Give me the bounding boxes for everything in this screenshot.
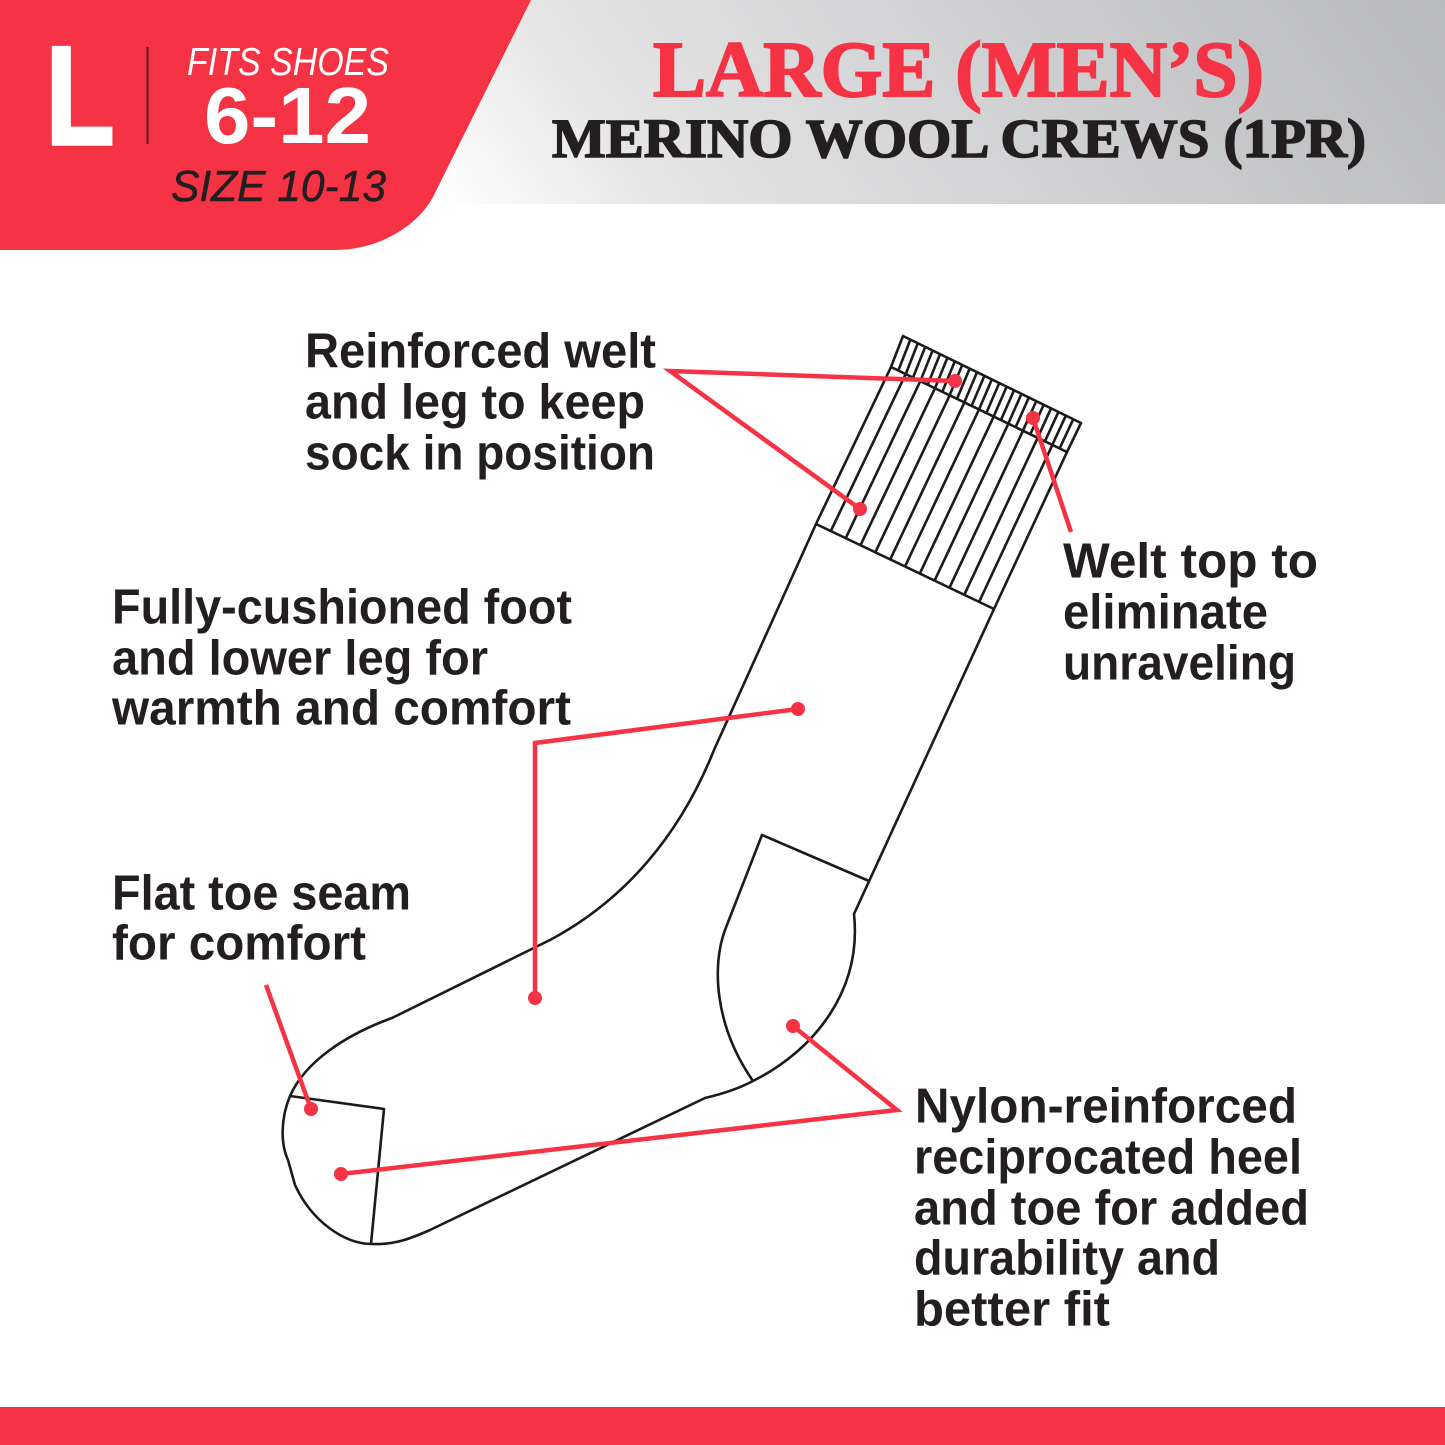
callout: welt and leg (670, 371, 962, 516)
callout text: welt top (1063, 534, 1318, 690)
callout text: heel and toe (914, 1080, 1309, 1336)
footer bar (0, 1407, 1445, 1445)
subtitle: MERINO WOOL CREWS (1PR) (552, 108, 1366, 169)
callout text: heel and toe: durability and (914, 1232, 1220, 1286)
shoe size range: 6-12 (204, 71, 371, 160)
size letter: L (46, 17, 115, 174)
title: LARGE (MEN’S) (653, 27, 1264, 114)
callout text: heel and toe: reciprocated heel (914, 1130, 1302, 1184)
callout text: toe seam: Flat toe seam (112, 866, 411, 920)
sock diagram (283, 336, 1081, 1244)
toe patch (290, 1096, 384, 1244)
callout text: reinforced welt (305, 324, 656, 480)
callout text: reinforced welt: Reinforced welt (305, 324, 656, 378)
red size badge (0, 0, 531, 250)
callout text: cushioned foot: warmth and comfort (111, 682, 571, 736)
callout: cushioned foot (528, 702, 805, 1005)
sock outline (283, 367, 1067, 1244)
callout text: welt top: eliminate (1063, 586, 1268, 640)
callout text: welt top: unraveling (1063, 636, 1296, 690)
callout text: heel and toe: better fit (914, 1282, 1110, 1336)
callout text: welt top: Welt top to (1063, 534, 1318, 588)
ribbed leg (816, 374, 1052, 609)
sock size range: SIZE 10-13 (171, 162, 387, 211)
callout text: cushioned foot: Fully-cushioned foot (112, 580, 572, 634)
badge divider (146, 47, 148, 144)
callout text: reinforced welt: sock in position (305, 426, 655, 480)
callout text: cushioned foot: and lower leg for (112, 632, 488, 686)
fits shoes label: FITS SHOES (187, 41, 389, 84)
callout text: heel and toe: Nylon-reinforced (915, 1080, 1297, 1134)
heel patch (718, 835, 869, 1081)
callout text: reinforced welt: and leg to keep (305, 376, 645, 430)
callout text: toe seam: for comfort (112, 916, 366, 970)
welt band (891, 336, 1081, 452)
callout: welt top (1026, 411, 1071, 532)
header band (400, 0, 1445, 204)
callout text: heel and toe: and toe for added (914, 1182, 1309, 1236)
callout: heel and toe (334, 1019, 897, 1181)
callout text: toe seam (112, 866, 411, 970)
callout text: cushioned foot (111, 580, 572, 736)
callout: toe seam (266, 985, 318, 1116)
